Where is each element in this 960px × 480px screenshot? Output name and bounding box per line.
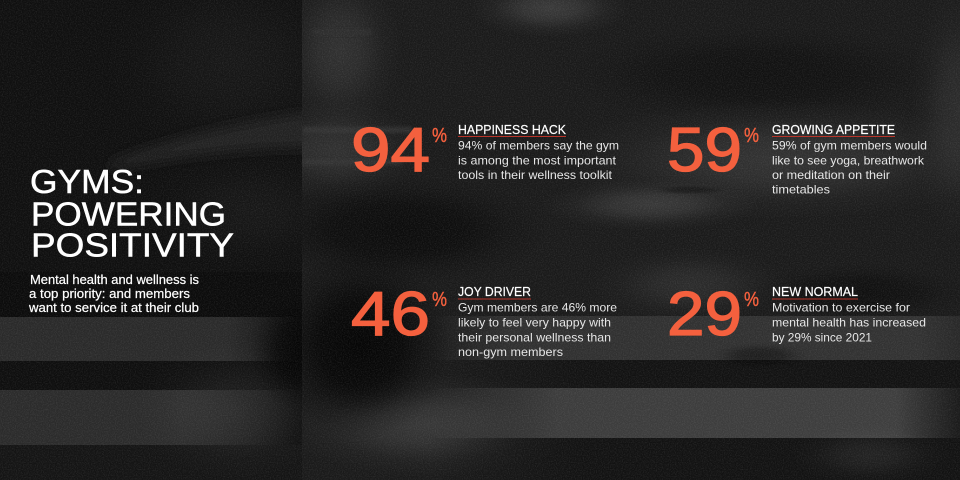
stat: 29% new normal <box>667 280 926 349</box>
title: GYMS: <box>30 164 144 201</box>
title: POWERING <box>31 196 226 234</box>
stat: 94% happiness hack: % <box>432 125 447 147</box>
stat: 46% joy driver: likely to feel very happy with <box>458 316 611 330</box>
subtitle <box>28 273 199 315</box>
stat: 46% joy driver: Gym members are 46% more <box>458 301 617 315</box>
stat: 46% joy driver: 46 <box>351 280 430 349</box>
stat: 29% new normal: mental health has increased <box>772 316 926 330</box>
stat: 29% new normal: NEW NORMAL <box>772 285 858 299</box>
stat: 94% happiness hack: tools in their wellness toolkit <box>458 168 613 182</box>
stat: 94% happiness hack: 94% of members say the gym <box>458 138 619 152</box>
stat: 29% new normal: by 29% since 2021 <box>772 330 872 344</box>
stat: 94% happiness hack <box>351 116 619 185</box>
subtitle: want to service it at their club <box>28 301 199 315</box>
stat: 59% growing appetite: GROWING APPETITE <box>772 123 895 137</box>
stat: 29% new normal: 29 <box>667 280 742 349</box>
title: POSITIVITY <box>31 228 234 264</box>
title <box>30 164 234 264</box>
stat: 94% happiness hack: HAPPINESS HACK <box>458 123 567 137</box>
subtitle: Mental health and wellness is <box>30 273 199 287</box>
stat: 46% joy driver: non-gym members <box>458 345 563 359</box>
stat: 29% new normal: Motivation to exercise for <box>772 301 910 315</box>
stat: 59% growing appetite: 59% of gym members would <box>772 138 927 152</box>
stat: 59% growing appetite: 59 <box>667 116 742 185</box>
stat: 94% happiness hack: 94 <box>351 116 430 185</box>
subtitle: a top priority: and members <box>29 287 190 301</box>
stat: 46% joy driver: JOY DRIVER <box>458 285 531 299</box>
stat: 59% growing appetite <box>667 116 927 196</box>
stat: 59% growing appetite: like to see yoga, breathwork <box>772 153 925 167</box>
stat: 46% joy driver: % <box>432 289 447 311</box>
stat: 29% new normal: % <box>744 289 759 311</box>
stat: 59% growing appetite: % <box>744 125 759 147</box>
stat: 94% happiness hack: is among the most important <box>458 153 617 167</box>
stat: 46% joy driver <box>351 280 617 359</box>
stat: 59% growing appetite: timetables <box>772 182 830 196</box>
stat: 59% growing appetite: or meditation on their <box>772 168 890 182</box>
stat: 46% joy driver: their personal wellness than <box>458 330 611 344</box>
